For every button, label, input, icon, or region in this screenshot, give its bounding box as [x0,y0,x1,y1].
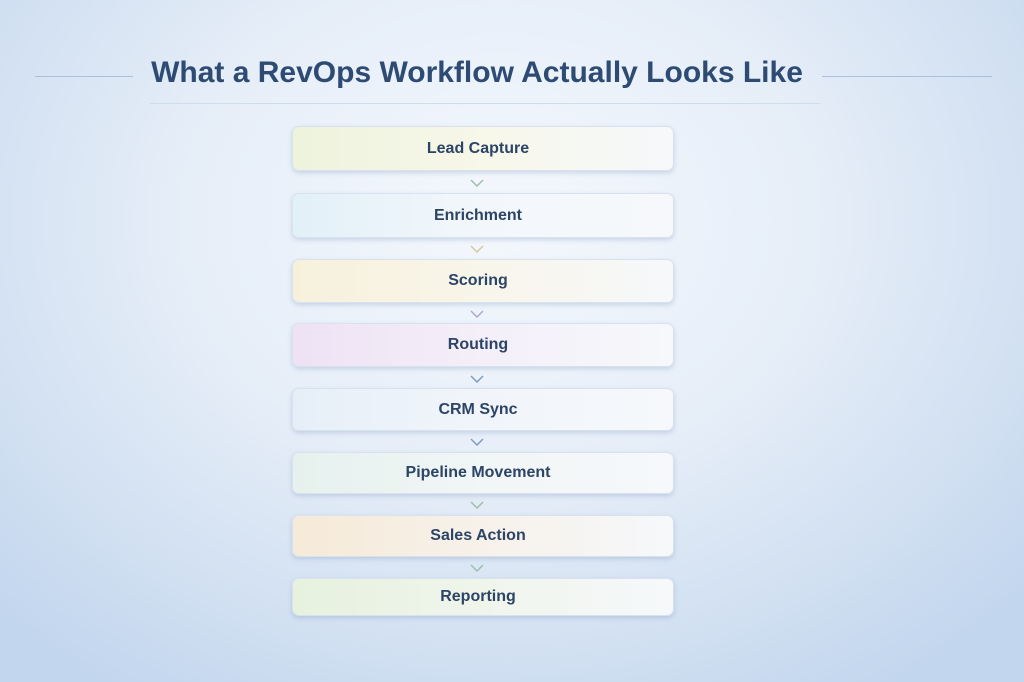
step: Pipeline Movement: Pipeline Movement [406,464,550,481]
step: Enrichment: Enrichment [434,206,522,224]
arrow [470,438,484,446]
step: Reporting: Reporting [440,588,516,605]
arrow [470,376,484,383]
arrow [470,502,484,509]
title: What a RevOps Workflow Actually Looks Like [151,56,803,89]
step: Lead Capture [292,126,674,171]
flow steps [290,126,676,620]
step: Scoring: Scoring [448,272,508,289]
step: Scoring [292,259,674,303]
step: CRM Sync [292,388,674,431]
step: Routing: Routing [448,336,508,353]
arrow [470,246,484,253]
step: Routing [292,323,674,367]
step: Reporting [292,578,674,616]
step: Pipeline Movement [292,452,674,494]
arrow [470,564,484,572]
arrow [470,180,484,187]
step: Sales Action: Sales Action [430,527,526,544]
step: Sales Action [292,515,674,557]
step: Lead Capture: Lead Capture [427,140,529,156]
step: CRM Sync: CRM Sync [438,400,518,418]
step: Enrichment [292,193,674,238]
arrow [470,310,484,318]
